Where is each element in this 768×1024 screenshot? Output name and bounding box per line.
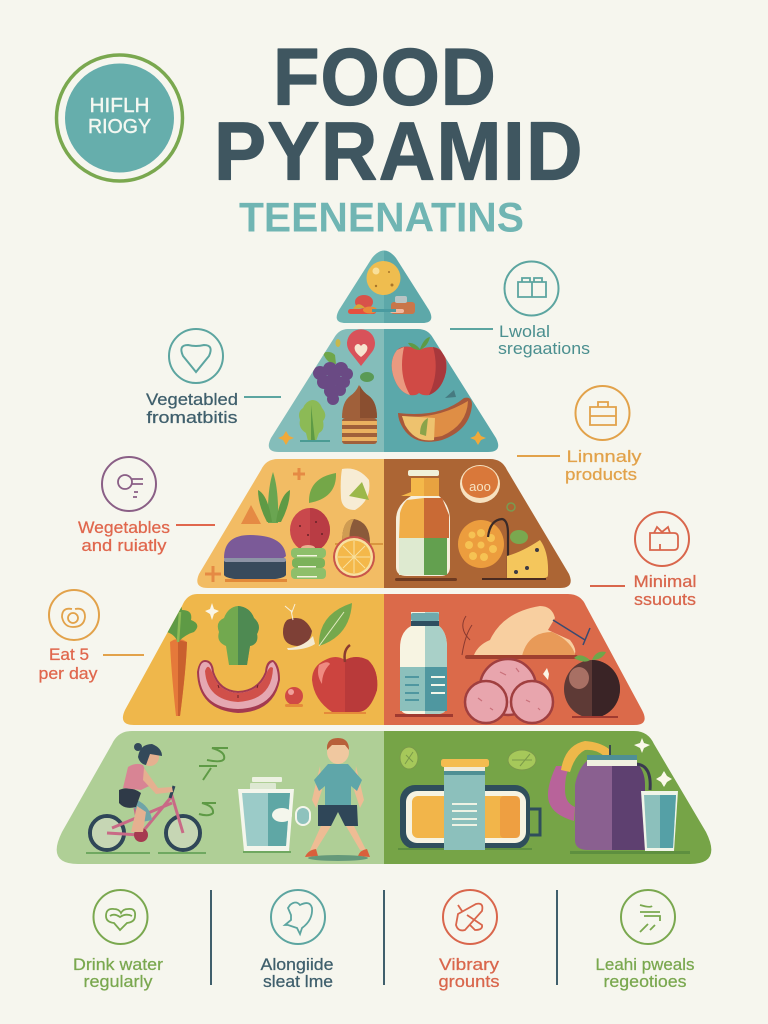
icon: carrot top <box>241 505 261 524</box>
icon: red fruit <box>285 687 303 707</box>
tip: alongiide: sleat lme <box>263 973 333 991</box>
callout: linnnaly: Linnnaly <box>566 448 642 466</box>
callout: linnnaly <box>517 386 642 484</box>
icon: juice bottle <box>395 470 457 581</box>
icon: apple <box>312 645 377 714</box>
icon: orange slice <box>333 536 375 578</box>
icon: apple <box>392 337 446 395</box>
tip: vibrary: grounts <box>438 973 500 991</box>
icon: lunch box <box>398 785 540 850</box>
callout: vegetabled <box>146 329 281 427</box>
callout: eat 5 per day: per day <box>38 665 98 683</box>
icon: carrot <box>168 607 198 716</box>
tier 1: top of pyramid <box>336 250 432 323</box>
icon: nut <box>335 519 383 545</box>
icon: sparkles <box>205 603 549 680</box>
callout: eat 5 per day: Eat 5 <box>49 646 89 664</box>
tip: alongiide: Alongiide <box>260 956 334 974</box>
callout: lwolal <box>450 262 590 358</box>
tier 4 <box>115 590 653 730</box>
icon: red food <box>348 295 377 314</box>
tip: drink water <box>73 890 164 991</box>
icon: citrus slice <box>458 520 504 568</box>
icon: small leaves <box>323 339 374 382</box>
icon: roast chicken <box>462 606 590 659</box>
tip: leahi pweals: Leahi pweals <box>596 956 694 974</box>
icon: small round leaves <box>400 747 536 770</box>
badge <box>56 55 182 181</box>
icon: dark plum <box>564 652 620 718</box>
icon: cheese on stand <box>482 519 548 580</box>
callout: vegetabled: Vegetabled <box>146 391 238 409</box>
icon: layered cake <box>342 385 377 444</box>
icon: plus marks <box>205 468 305 582</box>
icon: milk bottle <box>395 612 453 717</box>
callout: minimal <box>590 512 696 609</box>
icon: nut <box>283 604 315 650</box>
callout: minimal: Minimal <box>634 573 696 591</box>
tier 5 <box>46 728 722 868</box>
icon: fruit bowl <box>398 398 472 442</box>
icon: berry <box>290 508 330 552</box>
icon: label column <box>441 759 489 850</box>
tier 3 <box>190 455 578 590</box>
icon: dish mark <box>445 390 456 398</box>
title: FOOD <box>273 31 496 122</box>
icon: water glass <box>238 777 310 853</box>
tip: vibrary: Vibrary <box>439 956 500 974</box>
tip: drink water: regularly <box>84 973 153 991</box>
icon: leaf <box>319 603 352 646</box>
callout: vegetabled: fromatbitis <box>146 409 238 427</box>
badge: HIFLH <box>90 95 150 117</box>
icon: heart pin <box>347 329 375 366</box>
icon: green sprout <box>258 472 290 523</box>
icon: boy <box>305 738 370 861</box>
tip: alongiide <box>260 890 334 991</box>
icon: watermelon <box>197 660 280 713</box>
callout: wegetables <box>78 457 215 555</box>
tier 2 <box>268 329 498 452</box>
tip: leahi pweals: regeotioes <box>604 973 686 991</box>
icon: leaf <box>309 473 336 503</box>
tip: vibrary <box>438 890 500 991</box>
icon: small swirl <box>507 503 528 544</box>
icon: round orange label: aoo <box>469 479 491 494</box>
icon: lettuce <box>218 606 259 665</box>
icon: green stack <box>291 548 326 579</box>
title <box>214 31 582 198</box>
callout: wegetables: Wegetables <box>78 519 170 537</box>
icon: cyclist girl and bike <box>86 743 206 853</box>
icon: burger <box>224 535 287 582</box>
icon: glass <box>570 791 690 854</box>
icon: purple flask <box>548 741 650 850</box>
icon: ham slices <box>465 659 553 723</box>
callout: wegetables: and ruiatly <box>82 537 167 555</box>
icon: lettuce <box>299 400 330 442</box>
icon: gold ball <box>366 261 400 295</box>
icon: motion marks <box>199 748 228 815</box>
callout: eat 5 per day <box>38 590 144 683</box>
callout: lwolal: Lwolal <box>499 323 550 341</box>
icon: sparkles <box>634 738 672 787</box>
badge: RIOGY <box>88 116 151 138</box>
icon: sparkles <box>278 431 486 445</box>
subtitle: TEENENATINS <box>239 194 524 240</box>
icon: layered snack <box>390 296 415 314</box>
icon: round orange label <box>460 465 500 503</box>
icon: egg slice <box>341 468 369 510</box>
callout: linnnaly: products <box>565 466 637 484</box>
tip: drink water: Drink water <box>73 956 164 974</box>
title: PYRAMID <box>214 105 582 198</box>
tip: leahi pweals <box>596 890 694 991</box>
callout: lwolal: sregaations <box>498 340 590 358</box>
icon: grapes <box>313 362 353 405</box>
callout: minimal: ssuouts <box>634 591 696 609</box>
